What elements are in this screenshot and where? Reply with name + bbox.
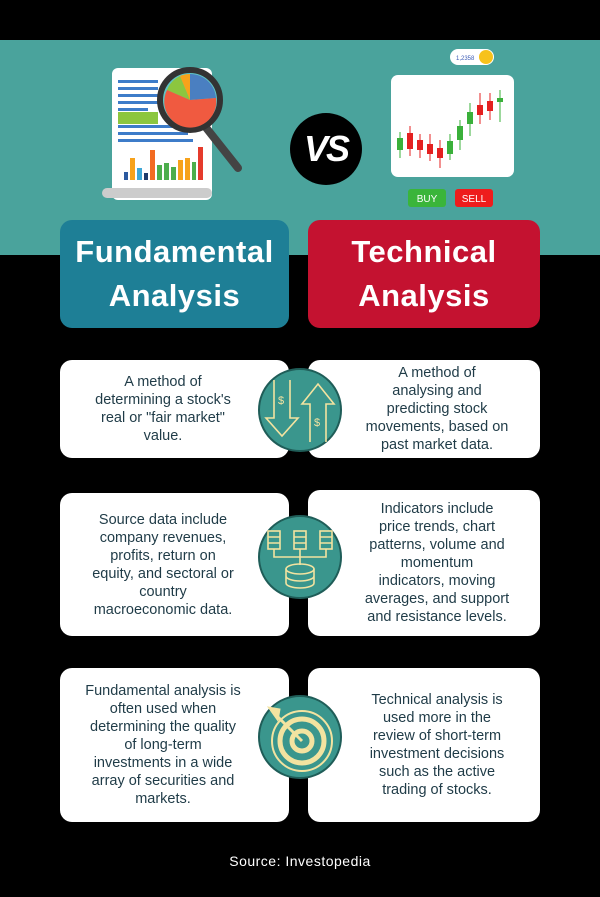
text: fundamental usage: determining the quality	[90, 719, 236, 735]
icon: data sources	[258, 515, 342, 599]
illustration: report with magnifier	[102, 67, 242, 200]
text: technical indicators: indicators, moving	[379, 573, 495, 589]
text: technical usage: trading of stocks.	[382, 782, 492, 798]
text: fundamental definition	[60, 360, 289, 458]
text: technical definition: analysing and	[392, 383, 482, 399]
text: technical indicators: and resistance levels.	[367, 609, 507, 625]
text: technical definition: predicting stock	[387, 401, 487, 417]
icon: target	[258, 695, 342, 779]
text: fundamental definition: value.	[144, 428, 182, 444]
text: fundamental usage: markets.	[135, 791, 191, 807]
text: technical definition: A method of	[398, 365, 476, 381]
text: fundamental data: company revenues,	[100, 530, 226, 546]
icon: VS circle	[290, 113, 362, 185]
text: technical indicators: averages, and support	[365, 591, 509, 607]
text: fundamental data: profits, return on	[110, 548, 216, 564]
text: fundamental definition: real or "fair market"	[101, 410, 225, 426]
text: technical definition: movements, based on	[366, 419, 508, 435]
icon: dollar arrows: $	[314, 417, 320, 429]
text: fundamental data: country	[139, 584, 187, 600]
text: fundamental data: Source data include	[99, 512, 227, 528]
text: technical definition	[308, 360, 540, 458]
text: fundamental usage: of long-term	[124, 737, 202, 753]
icon: dollar arrows: $	[278, 395, 284, 407]
heading: Technical Analysis: Technical	[351, 234, 497, 269]
text: technical indicators: patterns, volume and	[369, 537, 505, 553]
text: technical usage: review of short-term	[373, 728, 501, 744]
text: technical indicators	[308, 490, 540, 636]
heading: Fundamental Analysis: Analysis	[109, 278, 240, 313]
illustration: candlestick chart: BUY	[417, 194, 438, 205]
text: fundamental usage: often used when	[110, 701, 216, 717]
icon: VS circle: VS	[304, 128, 348, 169]
text: technical definition: past market data.	[381, 437, 493, 453]
text: fundamental usage: Fundamental analysis is	[85, 683, 241, 699]
text: technical indicators: Indicators include	[381, 501, 493, 517]
text: technical usage: Technical analysis is	[371, 692, 503, 708]
heading: Technical Analysis	[308, 220, 540, 328]
text: fundamental usage: investments in a wide	[94, 755, 232, 771]
text: fundamental usage: array of securities and	[92, 773, 234, 789]
text: fundamental data: macroeconomic data.	[94, 602, 232, 618]
heading: Fundamental Analysis: Fundamental	[75, 234, 274, 269]
text: technical indicators: momentum	[401, 555, 473, 571]
icon: dollar arrows	[258, 368, 342, 452]
heading: Technical Analysis: Analysis	[358, 278, 490, 313]
illustration: candlestick chart: 1,2358	[456, 56, 475, 62]
text: fundamental data: equity, and sectoral or	[92, 566, 234, 582]
text: technical indicators: price trends, chart	[379, 519, 495, 535]
text: technical usage: such as the active	[379, 764, 495, 780]
teal header band	[0, 40, 600, 255]
text: fundamental data	[60, 493, 289, 636]
text: technical usage: investment decisions	[370, 746, 504, 762]
illustration: candlestick chart	[391, 49, 514, 207]
text: fundamental usage	[60, 668, 289, 822]
text: fundamental definition: determining a stock's	[95, 392, 231, 408]
text: technical usage: used more in the	[383, 710, 491, 726]
text: fundamental definition: A method of	[124, 374, 202, 390]
heading: Fundamental Analysis	[60, 220, 289, 328]
illustration: candlestick chart: SELL	[462, 194, 487, 205]
text: source footer: Source: Investopedia	[229, 853, 371, 869]
text: technical usage	[308, 668, 540, 822]
